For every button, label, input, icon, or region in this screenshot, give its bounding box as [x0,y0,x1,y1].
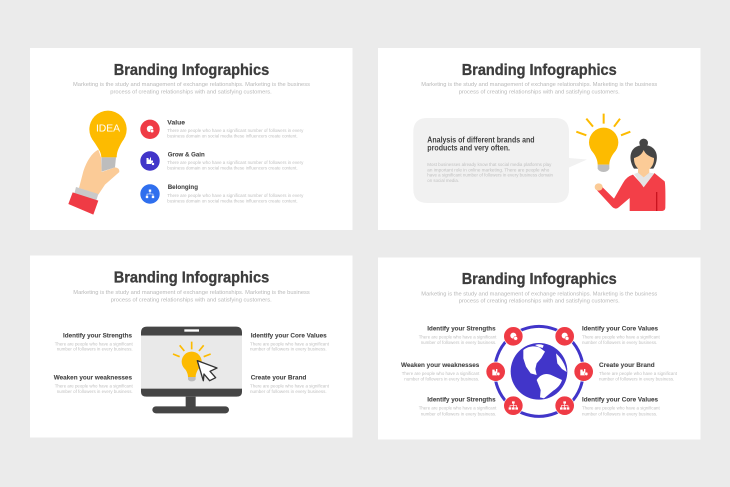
subtitle: process of creating relationships with and satisfying customers. [111,297,272,303]
illustration: woman presenter [595,139,665,211]
item: grow and gain: There are people who have a significant number of followers in every [167,160,304,165]
text: identify your core values, top [582,325,660,345]
subtitle: Marketing is the study and management of exchange relationships. Marketing is the business [421,291,657,297]
subtitle [73,82,310,95]
text: weaken your weaknesses: Weaken your weaknesses [401,362,480,369]
text: identify your core values: Identify your Core Values [251,332,327,339]
text: identify your strengths, top: number of followers in every business. [421,340,496,345]
text: identify your strengths [55,332,133,352]
text: identify your strengths, bottom [419,397,497,416]
bubble text: products and very often. [427,144,510,153]
item: belonging: Belonging [168,184,198,191]
text: identify your core values, bottom: number of followers in every business. [582,411,657,416]
item: belonging: business domain on social media these influencers create content. [167,199,298,204]
bubble text: have a significant number of followers in every business domain [427,173,553,178]
item: value: Value [167,119,185,126]
text: identify your core values [250,332,330,352]
text: create your brand: Create your Brand [599,362,655,369]
item: grow and gain: Grow & Gain [168,151,205,158]
diagram: globe ring with red icon nodes [486,326,593,416]
title: Branding Infographics [114,62,269,79]
icon: light bulb with rays [576,114,630,172]
text: identify your strengths: number of followers in every business. [57,347,133,352]
panel: speech bubble and presenter [378,48,700,230]
text: identify your strengths, bottom: Identify your Strengths [427,397,496,404]
text: identify your core values, top: There are people who have a significant [582,334,660,339]
text: create your brand: There are people who have a significant [599,371,678,376]
item: grow and gain: business domain on social media these influencers create content. [167,165,298,170]
bubble text: an important role in online marketing. There are people who [427,167,550,172]
text: weaken your weaknesses [54,375,133,394]
item: grow and gain [140,151,304,171]
text: create your brand: number of followers in every business. [599,377,674,382]
bubble text: Analysis of different brands and [427,136,535,145]
subtitle [73,290,310,303]
text: create your brand [250,375,330,394]
text: identify your core values, top: Identify your Core Values [582,325,658,332]
text: create your brand: There are people who have a significant [250,384,330,389]
bubble text: Most businesses already know that social media platforms play [427,162,552,167]
item: value: business domain on social media these influencers create content. [167,134,298,139]
text: weaken your weaknesses: There are people who have a significant [55,384,133,389]
text: identify your strengths, bottom: There are people who have a significant [419,406,497,411]
panel: monitor [30,256,352,438]
subtitle: process of creating relationships with and satisfying customers. [110,89,272,95]
subtitle: process of creating relationships with and satisfying customers. [459,299,620,305]
title: Branding Infographics [114,270,269,287]
subtitle: Marketing is the study and management of exchange relationships. Marketing is the business [73,82,310,88]
subtitle [421,291,657,305]
subtitle: Marketing is the study and management of exchange relationships. Marketing is the business [421,82,657,88]
text: identify your core values, bottom [582,397,660,416]
text: identify your strengths: There are people who have a significant [55,341,133,346]
text: identify your strengths, top [419,325,497,345]
text: weaken your weaknesses: There are people who have a significant [402,371,480,376]
bubble text [427,136,553,183]
text: weaken your weaknesses: Weaken your weaknesses [54,375,132,382]
text: create your brand: number of followers in every business. [250,389,327,394]
text: create your brand: Create your Brand [251,375,306,382]
subtitle [421,82,657,95]
item: belonging: There are people who have a significant number of followers in every [167,193,304,198]
text: identify your core values: number of followers in every business. [250,347,327,352]
text: identify your core values, bottom: There are people who have a significant [582,406,660,411]
item: value: There are people who have a significant number of followers in every [167,128,304,133]
text: identify your core values, bottom: Identify your Core Values [582,397,658,404]
panel: idea hand [30,48,352,230]
subtitle: Marketing is the study and management of exchange relationships. Marketing is the business [73,290,310,296]
panel: globe [378,258,700,440]
illustration: hand holding idea bulb [68,111,127,215]
text: identify your strengths, top: There are people who have a significant [419,334,497,339]
subtitle: process of creating relationships with and satisfying customers. [459,89,620,95]
illustration: hand holding idea bulb: IDEA [96,123,120,134]
item: belonging [140,184,304,204]
title: Branding Infographics [462,62,617,79]
text: identify your strengths, bottom: number of followers in every business. [421,411,496,416]
title: Branding Infographics [462,271,617,288]
text: create your brand [599,362,678,382]
bubble text: on social media. [427,178,459,183]
text: weaken your weaknesses: number of followers in every business. [404,377,479,382]
text: identify your strengths, top: Identify your Strengths [427,325,496,332]
text: identify your strengths: Identify your Strengths [63,332,132,339]
illustration: monitor with bulb and cursor [141,327,242,413]
text: identify your core values: There are people who have a significant [250,341,330,346]
speech bubble [413,118,587,203]
text: weaken your weaknesses [401,362,480,382]
text: weaken your weaknesses: number of followers in every business. [57,389,133,394]
item: value [140,119,304,139]
text: identify your core values, top: number of followers in every business. [582,340,657,345]
